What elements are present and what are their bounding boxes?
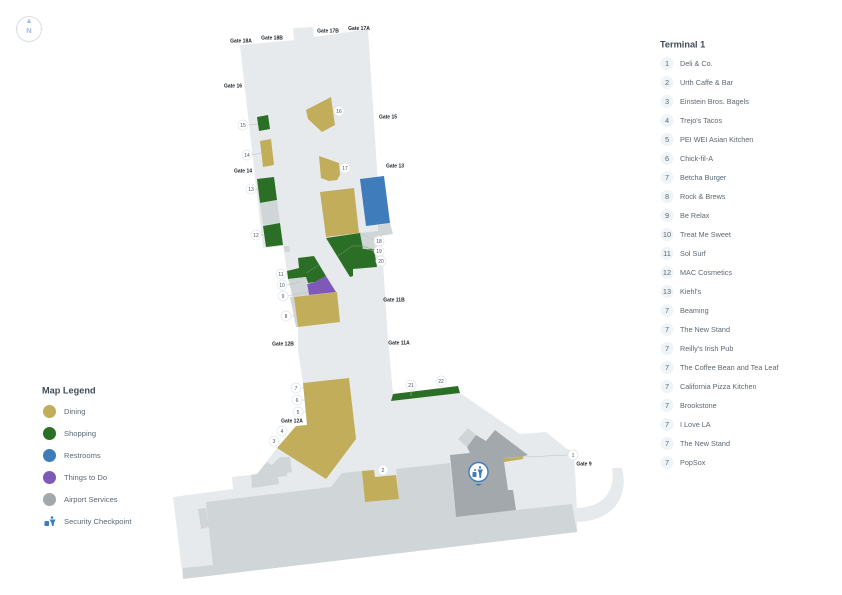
panel: terminal 1 directory: The New Stand [680, 439, 730, 448]
panel: terminal 1 directory: 10 [663, 230, 671, 239]
gate labels: Gate 17B [317, 28, 339, 34]
panel: map legend [42, 386, 132, 526]
panel: terminal 1 directory: Brookstone [680, 401, 717, 410]
service strip [290, 297, 298, 327]
legend heading: Map Legend [42, 386, 96, 396]
panel: terminal 1 directory [660, 40, 779, 469]
panel: terminal 1 directory: Sol Surf [680, 249, 707, 258]
shopping: unit 15 [257, 115, 270, 131]
map number markers: 4 [281, 429, 284, 435]
panel: terminal 1 directory: 7 [665, 401, 669, 410]
map number markers: 8 [285, 314, 288, 320]
panel: terminal 1 directory: MAC Cosmetics [680, 268, 732, 277]
map number markers: 17 [342, 166, 348, 172]
map number markers: 5 [297, 410, 300, 416]
panel: terminal 1 directory: 11 [663, 249, 671, 258]
gate labels: Gate 16 [224, 84, 242, 90]
icon: compass: N [26, 26, 32, 35]
panel: terminal 1 directory: 2 [665, 78, 669, 87]
gate labels: Gate 17A [348, 26, 370, 32]
panel: terminal 1 directory: Chick-fil-A [680, 154, 713, 163]
panel: terminal 1 directory: Betcha Burger [680, 173, 727, 182]
panel: terminal 1 directory: 13 [663, 287, 671, 296]
map number markers: 13 [248, 187, 254, 193]
map number markers: 18 [376, 239, 382, 245]
panel: terminal 1 directory: Einstein Bros. Bagels [680, 97, 749, 106]
panel: map legend: Shopping [64, 429, 96, 438]
icon: security checkpoint pin [469, 462, 488, 486]
map number markers: 7 [295, 386, 298, 392]
panel: terminal 1 directory: 7 [665, 382, 669, 391]
small service square [284, 246, 290, 252]
panel: terminal 1 directory: 9 [665, 211, 669, 220]
panel: map legend: Dining [64, 407, 86, 416]
map number markers: 14 [244, 153, 250, 159]
directory heading: Terminal 1 [660, 40, 705, 50]
gate labels: Gate 14 [234, 168, 252, 174]
panel: terminal 1 directory: Kiehl's [680, 287, 702, 296]
dining sliver [503, 456, 523, 462]
panel: terminal 1 directory: 6 [665, 154, 669, 163]
map number markers: 6 [296, 398, 299, 404]
map number markers: 22 [438, 379, 444, 385]
gate labels: Gate 18A [230, 38, 252, 44]
panel: terminal 1 directory: 7 [665, 458, 669, 467]
panel: terminal 1 directory: PopSox [680, 458, 706, 467]
panel: map legend: Things to Do [64, 473, 107, 482]
map number markers: 15 [240, 123, 246, 129]
shopping: unit 11 [287, 256, 326, 283]
panel: terminal 1 directory: Deli & Co. [680, 59, 713, 68]
curved walkway [575, 468, 624, 522]
map number markers: 9 [282, 294, 285, 300]
panel: terminal 1 directory: 4 [665, 116, 669, 125]
service block near security [458, 428, 476, 447]
panel: map legend: Security Checkpoint [64, 517, 132, 526]
gate labels: Gate 12A [281, 418, 303, 424]
gate labels: Gate 11B [383, 298, 405, 304]
gate labels: Gate 13 [386, 164, 404, 170]
small service room [198, 508, 209, 529]
map number markers: 2 [382, 468, 385, 474]
shopping: units 18-20 [326, 233, 377, 277]
panel: terminal 1 directory: 7 [665, 344, 669, 353]
dining: centre unit [320, 188, 359, 237]
gate labels: Gate 9 [576, 462, 592, 468]
panel: terminal 1 directory: PEI WEI Asian Kitchen [680, 135, 753, 144]
gate labels: Gate 15 [379, 114, 397, 120]
terminal floor plan [173, 27, 624, 579]
restrooms [360, 176, 390, 226]
security hall [450, 430, 528, 517]
gate labels: Gate 18B [261, 36, 283, 42]
dining: unit 2 [362, 470, 399, 502]
panel: terminal 1 directory: 1 [665, 59, 669, 68]
panel: terminal 1 directory: The New Stand [680, 325, 730, 334]
panel: terminal 1 directory: 5 [665, 135, 669, 144]
panel: terminal 1 directory: Urth Caffe & Bar [680, 78, 734, 87]
panel: terminal 1 directory: California Pizza Kitchen [680, 382, 757, 391]
map number markers: 12 [253, 233, 259, 239]
gate labels: Gate 11A [388, 340, 410, 346]
service floor [183, 463, 577, 579]
map number markers [238, 106, 578, 475]
map number markers: 20 [378, 259, 384, 265]
panel: terminal 1 directory: 7 [665, 420, 669, 429]
dining: large unit [277, 378, 356, 479]
service block between 13 and 12 [260, 200, 280, 225]
icon: compass [16, 16, 42, 42]
dining: unit 8 [294, 292, 340, 327]
panel: terminal 1 directory: 12 [663, 268, 671, 277]
panel: terminal 1 directory: Be Relax [680, 211, 710, 220]
panel: terminal 1 directory: Beaming [680, 306, 709, 315]
panel: terminal 1 directory: 7 [665, 439, 669, 448]
dining: unit 17 [319, 156, 340, 181]
panel: terminal 1 directory: 7 [665, 363, 669, 372]
things to do [307, 276, 336, 295]
map number markers: 21 [408, 383, 414, 389]
panel: terminal 1 directory: Trejo's Tacos [680, 116, 722, 125]
panel: terminal 1 directory: Rock & Brews [680, 192, 726, 201]
gate labels [224, 26, 592, 468]
map number markers: 11 [278, 272, 284, 278]
map number markers: 10 [279, 283, 285, 289]
panel: terminal 1 directory: Treat Me Sweet [680, 230, 731, 239]
panel: map legend: Airport Services [64, 495, 118, 504]
shopping: unit 13 [257, 177, 277, 203]
shopping: unit 12 [263, 223, 283, 247]
map number markers: 3 [273, 439, 276, 445]
panel: terminal 1 directory: Reilly's Irish Pub [680, 344, 733, 353]
dining: unit 14 [260, 139, 274, 167]
panel: terminal 1 directory: The Coffee Bean and Tea Leaf [680, 363, 779, 372]
panel: terminal 1 directory: 7 [665, 325, 669, 334]
panel: terminal 1 directory: 8 [665, 192, 669, 201]
panel: map legend: Restrooms [64, 451, 101, 460]
panel: terminal 1 directory: 7 [665, 173, 669, 182]
concourse and terminal floor [173, 27, 577, 579]
service block under restrooms [360, 223, 393, 250]
gate labels: Gate 12B [272, 342, 294, 348]
service block 9-10 [288, 277, 309, 297]
shopping: units 21-22 [391, 386, 460, 401]
map number markers: 1 [572, 453, 575, 459]
map number markers: 16 [336, 109, 342, 115]
panel: terminal 1 directory: 3 [665, 97, 669, 106]
gate service area [251, 457, 292, 488]
map number markers: 19 [376, 249, 382, 255]
panel: terminal 1 directory: I Love LA [680, 420, 711, 429]
panel: terminal 1 directory: 7 [665, 306, 669, 315]
dining: unit 16 [306, 97, 335, 132]
